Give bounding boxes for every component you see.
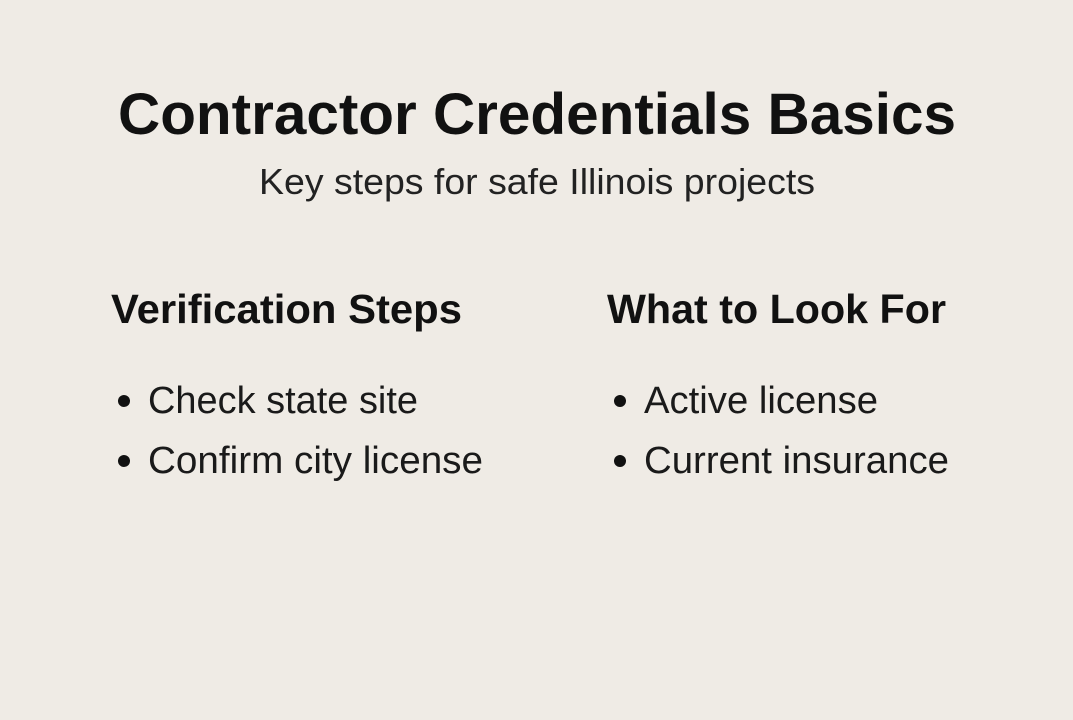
bullet list: verification: Check state site — [148, 380, 418, 422]
title: Contractor Credentials Basics — [118, 82, 956, 147]
bullet list: look for — [614, 380, 949, 482]
bullet list: verification — [118, 380, 483, 482]
heading: what to look for: What to Look For — [607, 286, 946, 332]
bullet list: verification: Confirm city license — [148, 440, 483, 482]
bullet list: look for: Active license — [644, 380, 878, 422]
subtitle: Key steps for safe Illinois projects — [259, 161, 815, 202]
bullet list: look for: Current insurance — [644, 440, 949, 482]
panel: what to look for — [607, 286, 949, 482]
heading: verification steps: Verification Steps — [111, 286, 462, 332]
panel: verification steps — [111, 286, 483, 482]
